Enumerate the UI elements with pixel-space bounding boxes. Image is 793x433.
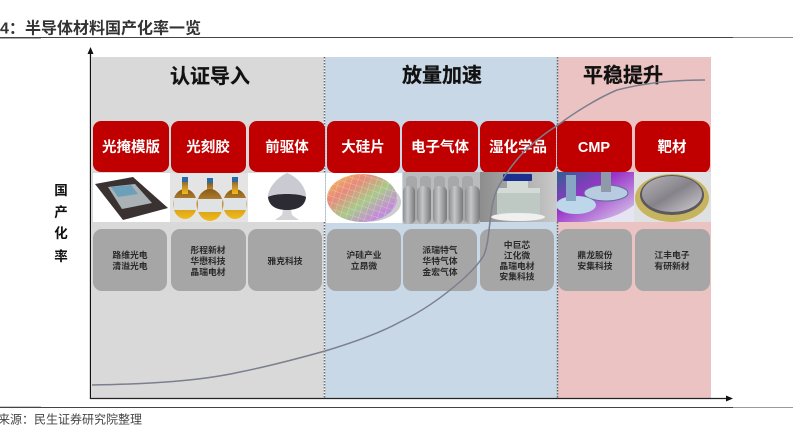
companies: 湿化学品: 江化微 — [504, 250, 530, 260]
y axis label: 化 — [54, 225, 68, 241]
heading: 放量加速: 放量加速 — [402, 64, 482, 87]
companies: 靶材: 有研新材 — [654, 260, 690, 271]
heading: 平稳提升: 平稳提升 — [583, 64, 663, 87]
companies: 电子气体: 金宏气体 — [422, 266, 458, 277]
label: 前驱体: 前驱体 — [265, 138, 309, 156]
companies: 湿化学品: 中巨芯 — [504, 239, 530, 250]
companies: 光刻胶: 华懋科技 — [190, 255, 226, 266]
companies: 光掩模版 — [93, 229, 167, 291]
label: 光掩模版 — [93, 121, 169, 172]
icon: precursor flask — [248, 173, 325, 222]
icon: gas cylinders — [403, 172, 480, 224]
category labels — [93, 121, 710, 173]
label: 前驱体 — [249, 121, 325, 172]
companies: 前驱体 — [248, 229, 322, 291]
companies: 靶材: 江丰电子 — [654, 249, 690, 260]
localization S-curve — [92, 80, 705, 385]
icon: photomask — [93, 173, 170, 222]
companies: 光刻胶: 彤程新材 — [190, 244, 226, 255]
companies: 前驱体: 雅克科技 — [267, 255, 303, 266]
companies: 湿化学品: 晶瑞电材 — [499, 260, 535, 271]
label: 湿化学品 — [480, 121, 556, 173]
companies: 光刻胶: 晶瑞电材 — [190, 266, 226, 277]
companies: 靶材 — [635, 229, 710, 291]
y axis arrow — [88, 47, 94, 399]
product images — [93, 172, 711, 224]
companies: 光掩模版: 清溢光电 — [112, 260, 148, 271]
x axis arrow — [90, 396, 733, 402]
companies: 光掩模版: 路维光电 — [112, 249, 148, 260]
icon: chemical jar — [480, 172, 557, 222]
companies: 光刻胶 — [171, 229, 246, 291]
companies: 大硅片 — [327, 229, 401, 291]
y axis label: 国 — [54, 183, 68, 198]
label: 光刻胶: 光刻胶 — [186, 138, 230, 156]
title: 半导体材料国产化率一览 — [25, 18, 201, 38]
companies: 大硅片: 沪硅产业 — [346, 249, 382, 260]
label: 电子气体 — [402, 121, 478, 173]
companies: 电子气体 — [403, 229, 477, 291]
panel: 平稳提升 stage — [558, 57, 711, 398]
label: 湿化学品: 湿化学品 — [489, 138, 547, 156]
source note: 来源：民生证券研究院整理 — [0, 412, 142, 426]
icon: sputtering target — [634, 172, 711, 222]
y axis label — [54, 183, 68, 264]
companies: CMP: 安集科技 — [577, 260, 613, 271]
label: 大硅片: 大硅片 — [341, 139, 385, 156]
label: 大硅片 — [327, 121, 400, 173]
companies: 电子气体: 华特气体 — [422, 255, 458, 266]
companies: 湿化学品 — [480, 229, 554, 291]
companies: 大硅片: 立昂微 — [351, 260, 377, 271]
label: 光掩模版: 光掩模版 — [102, 138, 160, 156]
y axis label: 产 — [54, 204, 68, 220]
heading: 认证导入: 认证导入 — [170, 65, 250, 88]
label: CMP: CMP — [578, 140, 610, 156]
label: 靶材 — [635, 121, 710, 173]
label: 电子气体: 电子气体 — [411, 138, 469, 156]
y axis label: 率 — [54, 248, 68, 264]
companies: CMP — [558, 229, 632, 291]
label: 光刻胶 — [171, 121, 246, 173]
panel: 放量加速 stage — [325, 57, 558, 398]
icon: silicon wafer — [326, 173, 402, 223]
companies: CMP: 鼎龙股份 — [577, 249, 613, 260]
companies: 湿化学品: 安集科技 — [499, 270, 535, 282]
icon: CMP polishing machine — [556, 172, 634, 222]
title: 4： — [0, 20, 25, 38]
label: 靶材: 靶材 — [658, 139, 687, 156]
companies: 电子气体: 派瑞特气 — [422, 244, 458, 255]
company boxes — [93, 229, 710, 291]
panel: 认证导入 stage — [92, 57, 324, 398]
icon: photoresist bottles — [170, 173, 248, 222]
label: CMP — [557, 121, 632, 172]
